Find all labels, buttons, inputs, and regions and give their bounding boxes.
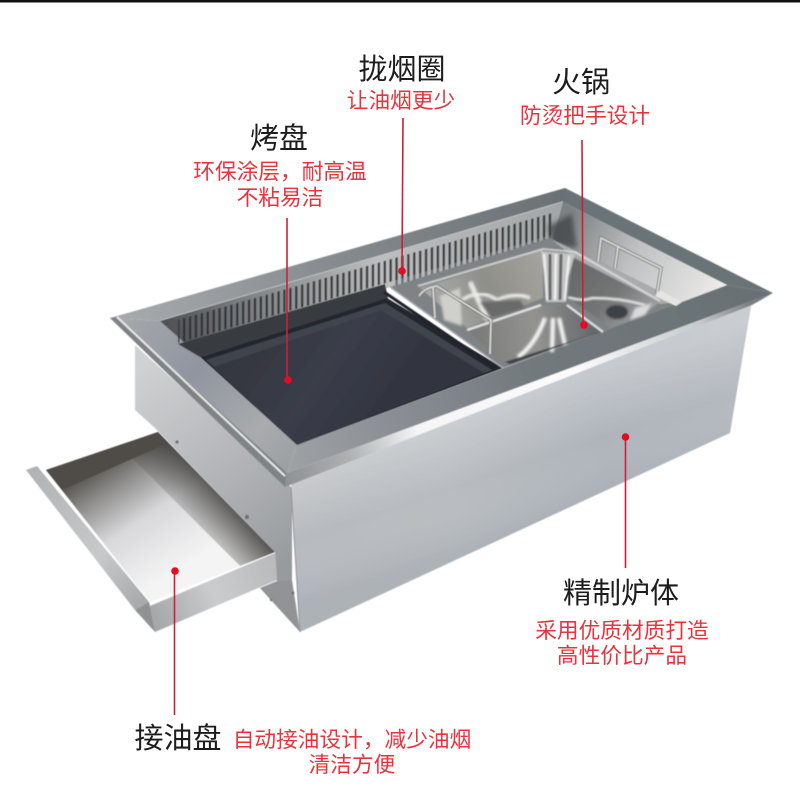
label: smoke ring: 拢烟圈	[358, 53, 446, 86]
label: furnace body: 采用优质材质打造	[535, 618, 709, 643]
callout: hot pot	[580, 140, 588, 329]
label: grill plate: 环保涂层，耐高温	[193, 159, 367, 184]
tray back wall	[46, 432, 166, 490]
pot far handle	[598, 238, 661, 294]
rim: right	[563, 188, 773, 293]
label: oil tray: 自动接油设计，减少油烟	[233, 727, 471, 752]
rim: front top surface	[287, 285, 773, 473]
grill plate	[200, 298, 503, 445]
drawer: oil tray	[26, 432, 277, 632]
body: front panel	[291, 300, 752, 632]
tray front wall	[150, 553, 277, 632]
callout: grill plate	[284, 218, 292, 384]
body: lower side panel below drawer	[260, 580, 300, 632]
rim: front lip	[285, 293, 773, 487]
interior: back wall with smoke slots	[160, 202, 563, 357]
pot: central post	[541, 251, 575, 302]
rivets	[175, 440, 294, 601]
divider between plate and pot	[390, 287, 503, 368]
label: oil tray: 清洁方便	[309, 752, 396, 777]
body: side panel	[135, 345, 292, 590]
label: oil tray: 接油盘	[134, 722, 222, 755]
product: stainless steel grill and hot pot unit	[26, 188, 773, 632]
tray interior	[46, 432, 275, 602]
tray side lip	[26, 466, 149, 610]
label: hot pot: 火锅	[552, 66, 610, 99]
pot: left compartment	[420, 250, 543, 328]
label: grill plate: 不粘易洁	[237, 185, 323, 210]
tray shadow edge	[120, 432, 275, 566]
callout: furnace body	[622, 433, 629, 568]
label: hot pot	[520, 66, 650, 128]
rim: left	[110, 318, 297, 473]
label: grill plate: 烤盘	[250, 122, 308, 155]
hot pot	[384, 238, 682, 369]
label: smoke ring	[347, 53, 455, 113]
callout: oil tray	[171, 567, 179, 715]
callout lines and dots	[171, 118, 629, 715]
pot: rim ridges	[418, 249, 660, 301]
rim: back	[110, 188, 572, 321]
pot: right compartment	[568, 258, 660, 328]
label: furnace body	[535, 577, 709, 668]
callout: smoke ring	[398, 118, 406, 275]
pot ledge	[390, 238, 682, 368]
pot near handle	[419, 286, 491, 354]
label: hot pot: 防烫把手设计	[520, 103, 650, 128]
label: furnace body: 精制炉体	[563, 577, 679, 610]
label: smoke ring: 让油烟更少	[347, 88, 455, 113]
label: oil tray	[134, 722, 471, 777]
label: furnace body: 高性价比产品	[557, 643, 687, 668]
interior: right wall	[552, 202, 727, 302]
pot: bottom compartment	[468, 305, 603, 362]
label: grill plate	[193, 122, 367, 210]
top black bar	[0, 0, 800, 2]
rim: left lip	[110, 317, 287, 487]
